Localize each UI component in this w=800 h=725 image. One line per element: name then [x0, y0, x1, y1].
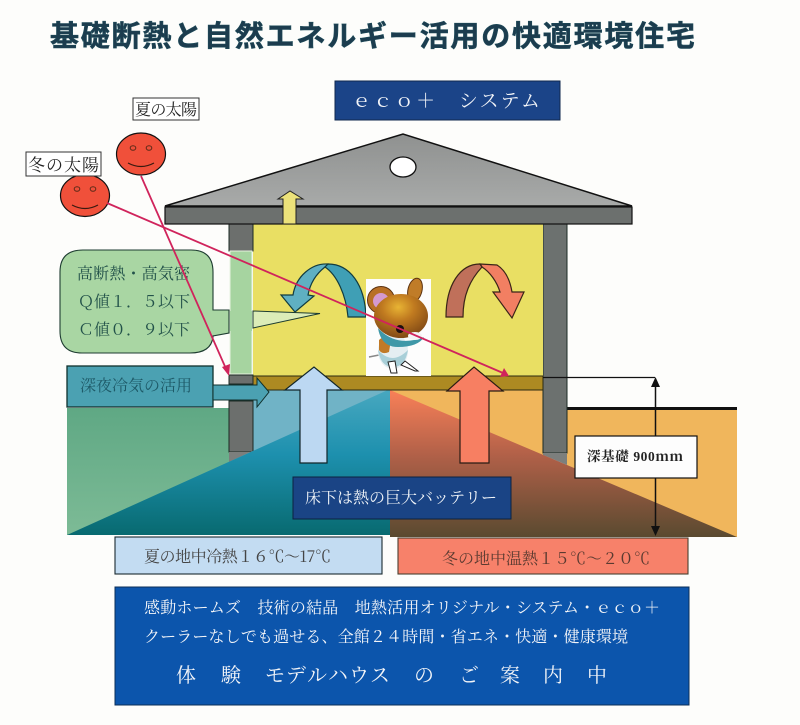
label: winter ground temperature	[398, 538, 688, 574]
arrow: cool air rising from ground	[285, 367, 342, 463]
label: summer ground temperature	[115, 537, 382, 574]
panel: model house announcement	[115, 587, 689, 705]
label: summer sun: 夏の太陽	[135, 101, 197, 119]
house: right wall	[543, 224, 567, 465]
callout: insulation and airtightness: Ｑ値１．５以下	[78, 293, 190, 311]
callout: insulation and airtightness	[60, 250, 320, 353]
label: deep foundation 900mm: 深基礎 900ｍｍ	[587, 448, 684, 464]
label: winter ground temperature: 冬の地中温熱１５℃～２０℃	[442, 546, 650, 569]
ground heat wedge: summer cool	[67, 389, 390, 535]
label: underfloor heat battery	[293, 477, 511, 519]
house: left lower wall	[229, 401, 253, 462]
label: deep foundation 900mm	[575, 436, 697, 478]
arrow: summer sun ray	[141, 176, 230, 376]
label: summer ground temperature: 夏の地中冷熱１６℃～17℃	[144, 544, 331, 567]
panel: model house announcement: クーラーなしでも過せる、全館２４時間・省エネ・快適・健康環境	[144, 627, 628, 646]
label: underfloor heat battery: 床下は熱の巨大バッテリー	[305, 489, 497, 507]
sun: summer	[116, 133, 166, 175]
underfloor space: cool side	[253, 390, 390, 535]
arrow: attic vent	[278, 191, 303, 224]
system name banner: ｅｃｏ＋ システム	[352, 91, 540, 112]
panel: model house announcement: 体験モデルハウスのご案内中	[176, 664, 607, 687]
arrow: blue circulation	[281, 264, 366, 317]
house: floor beam	[253, 376, 543, 390]
label: winter sun: 冬の太陽	[28, 156, 99, 175]
arrow: night air intake	[213, 378, 269, 407]
underfloor space: warm side	[390, 390, 543, 537]
dimension: foundation depth	[543, 377, 660, 536]
callout: insulation and airtightness: Ｃ値０．９以下	[78, 321, 190, 339]
title: 基礎断熱と自然エネルギー活用の快適環境住宅	[50, 20, 695, 53]
label: late-night cool air: 深夜冷気の活用	[80, 377, 192, 395]
label: late-night cool air	[67, 366, 213, 407]
house: roof	[165, 134, 632, 224]
sun: winter	[60, 174, 110, 216]
panel: model house announcement: 感動ホームズ 技術の結晶 地熱活用オリジナル・システム・ｅｃｏ＋	[144, 598, 660, 617]
callout: insulation and airtightness: 高断熱・高気密	[77, 264, 190, 283]
ground: summer side green block	[67, 408, 229, 535]
house: yellow interior	[253, 224, 543, 376]
ground heat wedge: winter warm	[390, 390, 737, 537]
arrow: winter sun ray	[107, 203, 509, 377]
system name banner	[335, 81, 560, 120]
icon: round attic window	[390, 157, 416, 177]
arrow: red circulation	[446, 264, 524, 318]
house: left upper wall	[229, 224, 253, 384]
arrow: warm air rising from ground	[447, 367, 503, 463]
ground: right orange block	[567, 407, 737, 537]
character: mouse mascot	[366, 277, 431, 376]
